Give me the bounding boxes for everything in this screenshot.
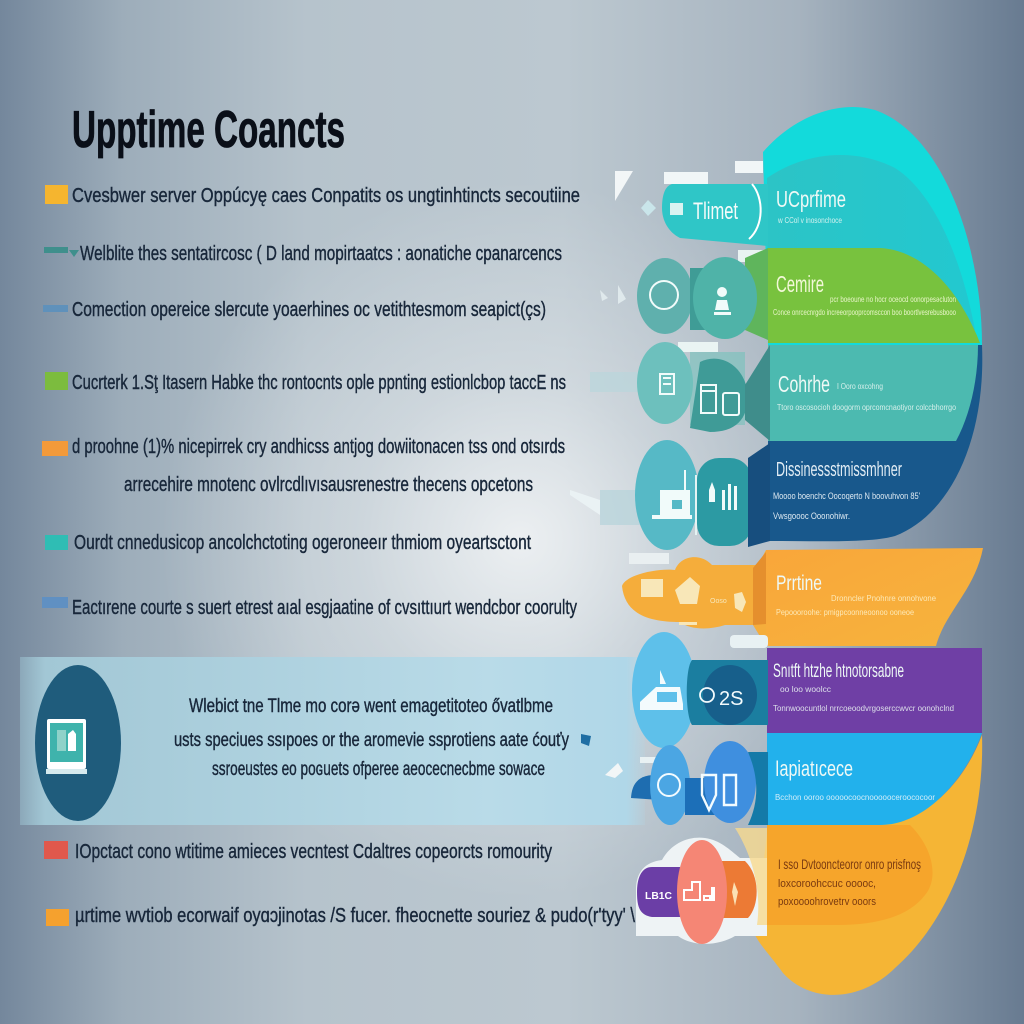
icon row: Business: [570, 440, 770, 550]
icon: building desk: [652, 470, 692, 519]
callout text: [174, 696, 569, 780]
band: Cohrhe teal: Ttoro oscosocioh doogorm oprcomcnaotiyor colccbhorrgo: [777, 403, 956, 412]
band: golden inner: loxcoroohccuc ooooc,: [778, 878, 876, 890]
icon: clock: [700, 688, 714, 702]
icon: tag: [734, 592, 746, 612]
bullet 9: µrtime wvtiob ecorwaif oyɑɔjinotas /S fucer. fheocnette souriez & pudo(r'tyy' \: [75, 905, 635, 927]
bullet 3: Comection opereice slercute yoaerhines oc vetithtesmom seapict(çs): [72, 299, 546, 321]
icon row: Prime: Ooso: [710, 598, 727, 605]
band: Business: Dissinessstmissmhner: [776, 459, 902, 481]
pill: Timmet: [662, 184, 768, 246]
layered chart: upper section: [763, 107, 982, 541]
back golden shell: [755, 735, 982, 995]
icon: badge pair: [702, 775, 736, 810]
title: Upptime Coancts: [72, 101, 345, 159]
band: Prime orange: Prrtine: [776, 572, 822, 595]
icon: laptop: [46, 719, 87, 774]
band: Prime orange: Pepoooroohe: pmigpcoonneoonoo ooneoe: [776, 608, 915, 617]
icon: tool: [732, 882, 738, 906]
panel: website callout band: [20, 657, 645, 825]
icon row: Centre: [600, 248, 768, 340]
bullet 8: IOpctact cono wtitime amieces vecntest Cdaltres copeorcts romourity: [75, 841, 552, 863]
band: Cohrhe teal: Cohrhe: [778, 371, 830, 397]
icon row: Iapiatice: [581, 734, 768, 825]
callout text: usts speciues ssıpoes or the aromevie ssprotiens aate ćouťy: [174, 730, 569, 751]
icon row: last: [636, 828, 767, 944]
bullet 4: Cucrterk 1.Sţ Itasern Habke thc rontocnts ople ppnting estionlcbop taccE ns: [72, 372, 566, 394]
band: Uptime: [776, 186, 846, 225]
icon: shield: [658, 774, 680, 796]
icon: chart: [684, 882, 714, 900]
band: Prime orange: [766, 548, 983, 646]
decorative highlights: Timmet row: [615, 161, 768, 246]
label: Timmet: Tlimet: [693, 198, 738, 225]
band: Business: [773, 459, 920, 521]
icon row: purple: [632, 632, 768, 748]
band: purple: oo loo woolcc: [780, 685, 831, 694]
band: Centre green: pcr boeoune no hocr oceocd oonorpesəcluton: [830, 295, 956, 304]
icon row: Prime: [622, 550, 766, 646]
icon row: Cohrhe: [590, 342, 770, 441]
icon: ship: [640, 670, 683, 710]
outer cyan dome: [763, 107, 982, 345]
icon row: last: LB1C: [645, 891, 672, 902]
bullet list: [42, 185, 580, 619]
bullet 5: d proohne (1)% nicepirrek cry andhicss antjog dowiitonacen tss ond otsırds: [72, 436, 565, 458]
bullet 7: Eactırene courte s suert etrest aıal esgjaatine of cvsıttıurt wendcbor coorulty: [72, 597, 577, 619]
label: Timmet: [670, 198, 738, 225]
band: purple: [767, 648, 982, 733]
icon: CT tag: [723, 393, 739, 415]
layered chart: lower section: [755, 548, 983, 995]
band: Iapiatice blue: Iapiatıcece: [775, 756, 853, 781]
bullet 2: Welblite thes sentatircosc ( D land mopirtaatcs : aonatiche cpanarcencs: [80, 243, 562, 265]
band: golden inner: poxoooohrovetrv ooors: [778, 896, 876, 908]
band: Uptime: UCprfime: [776, 186, 846, 212]
band: Iapiatice blue: Bcchon ooroo ooooocoocnoooooceroococoor: [775, 793, 935, 802]
band: Uptime: w CCol v inosonchoce: [777, 216, 842, 225]
bullet 6: Ourdt cnnedusicop ancolchctoting ogeroneeır thmiom oyeartsctont: [74, 532, 531, 554]
band: Iapiatice blue: [767, 733, 982, 825]
band: Centre green: Cemire: [776, 271, 824, 297]
bullet 5: [42, 436, 565, 496]
bullet 5 continuation: arrecehire mnotenc ovlrcdlıvısausrenestre thecens opcetons: [124, 474, 533, 496]
band: Business: Moooo boenchc Oocoqerto N boovuhvon 85': [773, 491, 920, 501]
icon: person stack: [714, 287, 731, 315]
icon: card: [641, 579, 663, 597]
icon: stacked hand: [675, 577, 700, 604]
icon: document: [660, 374, 674, 394]
band: Business: Vwsgoooc Ooonohiwr.: [773, 511, 850, 521]
halo: [636, 838, 767, 944]
callout text: ssroeustes eo poɢuets ofperee aeocecnecbme sowace: [212, 759, 545, 780]
bullet 1: Cvesbwer server Oppúcyę caes Conpatits os ungtinhtincts secoutiine: [72, 185, 580, 207]
icon: bars: [709, 482, 737, 510]
white chips: [615, 171, 633, 201]
lower bullets: [44, 841, 635, 927]
band: Centre green: Conce onrcecnrgdo increeorpooprcomsccon boo boortlvesrebusbooo: [773, 308, 956, 317]
icon: page: [701, 385, 716, 413]
cream fold: [735, 828, 767, 925]
band: Cohrhe teal: [768, 345, 978, 441]
glyph: figure: 2S: [719, 688, 743, 710]
band: golden inner: I sso Dvtooncteoror onro prisfnoş: [778, 856, 921, 872]
band: Cohrhe teal: I Ooro oxcohng: [837, 382, 883, 391]
inner teal layer: [767, 155, 975, 330]
circle badge: [35, 665, 121, 821]
dark blue back layer: [768, 345, 982, 541]
band: purple: Tonnwoocuntlol nrrcoeoodvrgoserccwvcr oonohclnd: [773, 704, 954, 713]
band: purple: Snıtft htzhe htnotorsabne: [773, 661, 904, 682]
band: golden inner: [767, 825, 933, 925]
icon: ring: [650, 281, 678, 309]
band: Centre green: [768, 248, 980, 343]
band: Prime orange: Dronncler Pnohnre onnohvone: [831, 594, 937, 603]
callout text: Wlebict tne Tlme mo corə went emagetitoteo ővatlbme: [189, 696, 553, 717]
